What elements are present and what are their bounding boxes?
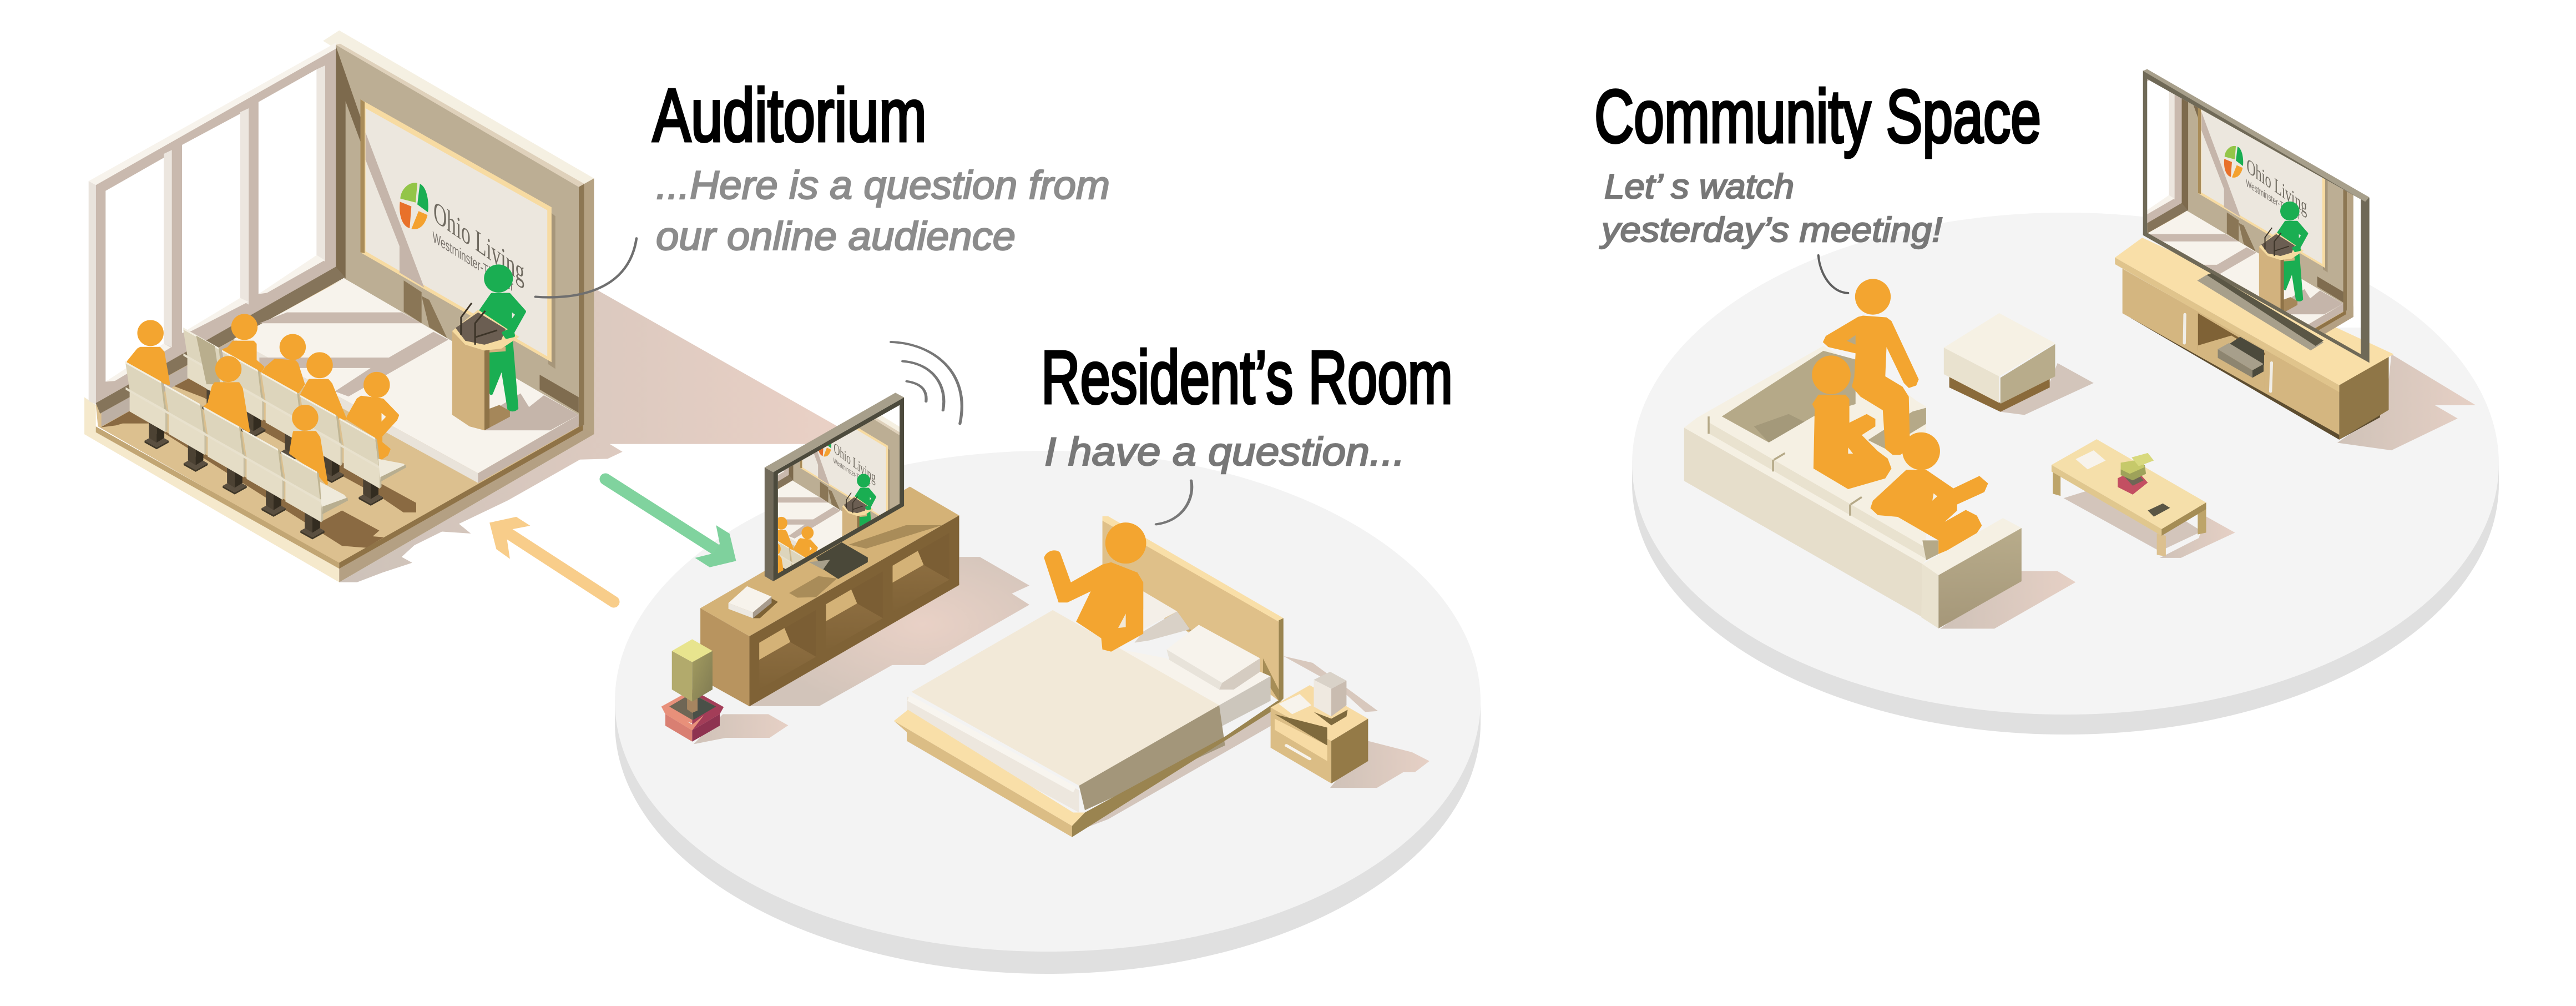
community figures on sofa: [1812, 279, 1988, 554]
headboard: [1103, 516, 1284, 701]
figure: seated left: [1812, 355, 1891, 489]
bed base: [894, 698, 1284, 837]
pillows: [1134, 591, 1260, 690]
text: community quote: [1599, 168, 1942, 249]
text: auditorium quote: [656, 164, 1110, 259]
title: Auditorium: Auditorium: [653, 73, 927, 157]
room shadow cast on the ground: [339, 288, 862, 582]
text: resident quote: I have a question...: [1044, 430, 1405, 474]
shadows: resident's room furniture: [694, 557, 1430, 828]
auditorium room: [84, 31, 594, 582]
title: Resident's Room: Resident’s Room: [1041, 335, 1453, 419]
sofa: [1684, 346, 2022, 628]
arrow: orange, room to auditorium: [489, 517, 614, 602]
arrow: green, auditorium to room: [605, 479, 736, 567]
figure: seated right: [1871, 432, 1988, 554]
TV console: community space: [2115, 238, 2393, 440]
shadows: community space furniture: [1940, 354, 2476, 628]
nightstand: [1271, 672, 1368, 783]
blanket: [907, 610, 1225, 812]
figure: standing speaker: [1823, 279, 1919, 455]
TV: community space, showing the auditorium: [2143, 69, 2370, 363]
callout line and wifi waves: resident's room: [891, 342, 1192, 524]
disc: community space floor: [1632, 213, 2499, 735]
text: community quote: Let’ s watch: [1604, 168, 1794, 206]
callout line: auditorium speaker: [536, 238, 637, 297]
bed: [894, 516, 1284, 837]
plant: [661, 639, 724, 742]
coffee table: [2052, 439, 2206, 556]
ottoman: [1944, 313, 2055, 412]
text: auditorium quote: ...Here is a question from: [656, 164, 1110, 208]
disc: resident's room floor: [615, 451, 1481, 974]
text: community quote: yesterday’s meeting!: [1599, 211, 1942, 249]
TV stand credenza: resident's room: [700, 487, 959, 706]
callout line: community speaker: [1819, 255, 1848, 293]
text: auditorium quote: our online audience: [656, 215, 1016, 259]
TV: resident's room, showing the auditorium: [765, 393, 905, 581]
resident figure waving: [1044, 522, 1146, 652]
title: Community Space: Community Space: [1594, 74, 2041, 158]
